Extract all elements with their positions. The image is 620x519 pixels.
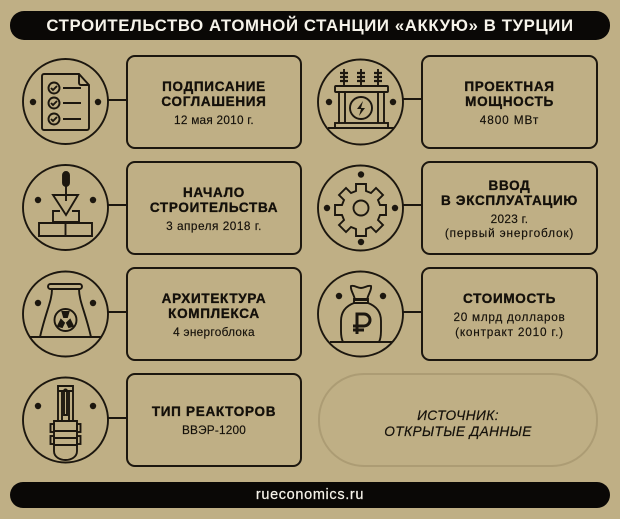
panel: commissioning: ВВОД: [489, 178, 530, 192]
panel: design capacity: МОЩНОСТЬ: [465, 94, 554, 109]
panel: source note: [318, 373, 598, 467]
panel: commissioning: (первый энергоблок): [445, 226, 574, 240]
panel: construction start: СТРОИТЕЛЬСТВА: [150, 200, 278, 215]
panel: construction start: НАЧАЛО: [183, 185, 245, 200]
panel: complex architecture: КОМПЛЕКСА: [168, 306, 260, 321]
title bar: [10, 11, 610, 40]
icon: transformer: [318, 60, 421, 144]
panel: cost: 20 млрд долларов: [454, 310, 565, 324]
panel: commissioning: 2023 г.: [491, 212, 528, 226]
title bar: СТРОИТЕЛЬСТВО АТОМНОЙ СТАНЦИИ «АККУЮ» В ТУРЦИИ: [46, 16, 574, 35]
panel: commissioning: В ЭКСПЛУАТАЦИЮ: [441, 192, 578, 208]
panel: signing: [126, 55, 302, 149]
icon: money bag with ruble: [318, 272, 421, 356]
panel: cost: СТОИМОСТЬ: [463, 291, 556, 306]
panel: complex architecture: 4 энергоблока: [173, 325, 255, 339]
panel: signing: 12 мая 2010 г.: [174, 113, 254, 127]
panel: reactor type: ВВЭР-1200: [182, 423, 246, 437]
footer bar: [10, 482, 610, 508]
panel: complex architecture: АРХИТЕКТУРА: [162, 291, 266, 306]
icon: cooling tower with radiation sign: [23, 272, 126, 356]
panel: complex architecture: [126, 267, 302, 361]
icon: reactor vessel: [23, 378, 126, 462]
panel: source note: ИСТОЧНИК:: [417, 408, 499, 423]
panel: design capacity: ПРОЕКТНАЯ: [464, 79, 555, 94]
panel: cost: (контракт 2010 г.): [455, 324, 564, 338]
panel: source note: ОТКРЫТЫЕ ДАННЫЕ: [384, 424, 532, 439]
panel: commissioning: [421, 161, 598, 255]
panel: construction start: 3 апреля 2018 г.: [166, 219, 262, 233]
footer bar: rueconomics.ru: [256, 487, 364, 503]
panel: signing: СОГЛАШЕНИЯ: [161, 94, 267, 109]
icon: gear: [318, 166, 421, 250]
panel: cost: [421, 267, 598, 361]
panel: signing: ПОДПИСАНИЕ: [162, 79, 266, 94]
panel: reactor type: [126, 373, 302, 467]
panel: design capacity: 4800 МВт: [480, 113, 539, 127]
icon: trowel and bricks: [23, 165, 126, 250]
icon: checklist document: [23, 59, 126, 144]
panel: construction start: [126, 161, 302, 255]
panel: design capacity: [421, 55, 598, 149]
panel: reactor type: ТИП РЕАКТОРОВ: [152, 404, 276, 419]
